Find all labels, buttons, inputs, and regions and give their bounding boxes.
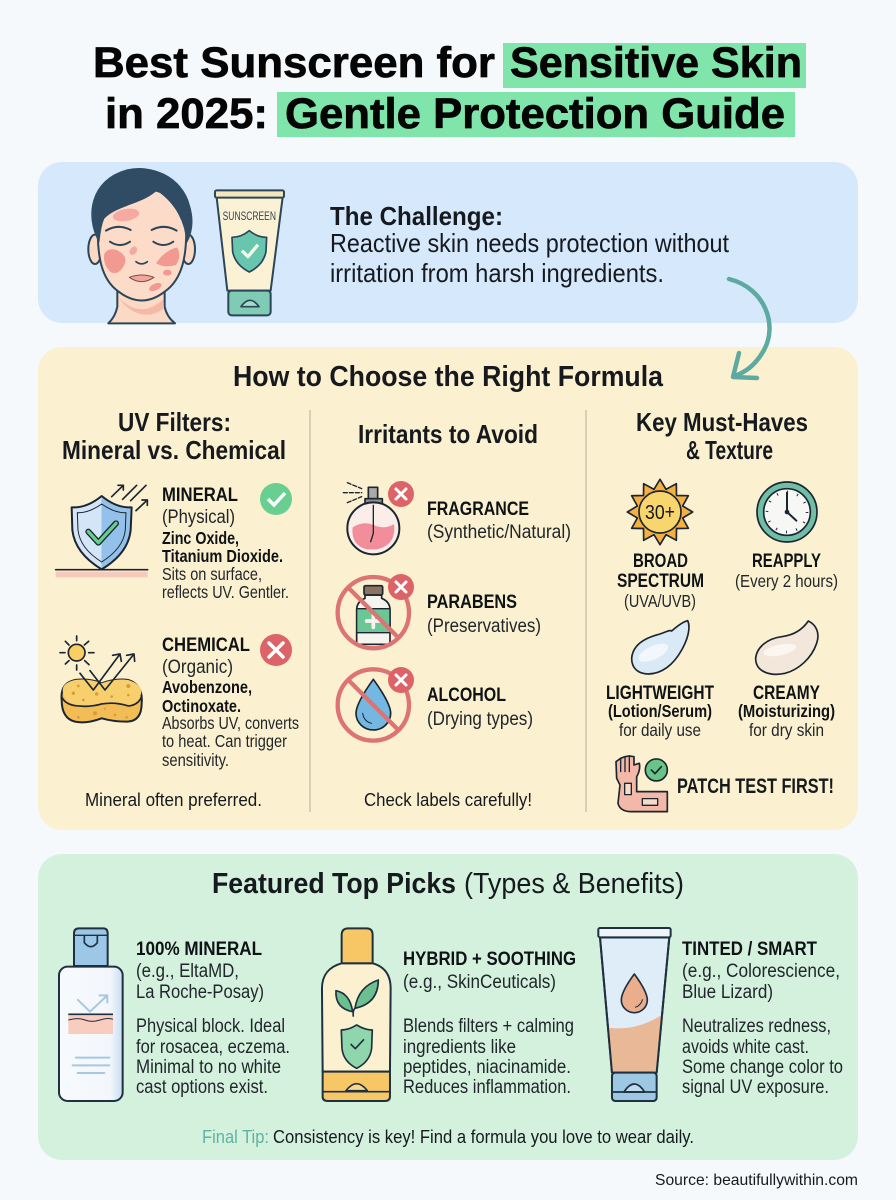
text: mineral: reflects UV. Gentler. xyxy=(162,582,289,602)
text: tinted / smart: avoids white cast. xyxy=(682,1037,809,1058)
text: hybrid + soothing: Reduces inflammation. xyxy=(403,1077,571,1098)
icon: clock xyxy=(757,482,817,542)
text: the challenge: Reactive skin needs protection without xyxy=(330,228,730,258)
icon: red cross badge xyxy=(260,634,292,666)
text: 100% mineral: (e.g., EltaMD, xyxy=(136,961,239,982)
icon: sunscreen tube: SUNSCREEN xyxy=(223,209,276,223)
heading: featured top picks: (Types & Benefits) xyxy=(464,868,684,900)
arrow: challenge to formula xyxy=(729,279,770,378)
text: irritant list: ALCOHOL xyxy=(427,685,506,706)
text: irritant list: FRAGRANCE xyxy=(427,499,529,520)
text: final tip: Consistency is key! Find a formula you love to wear daily. xyxy=(273,1127,694,1147)
text: broad spectrum: BROAD xyxy=(633,551,688,572)
text: hybrid + soothing xyxy=(403,949,576,1098)
icon: patch test arm xyxy=(616,756,667,812)
text: chemical xyxy=(162,635,299,770)
text: 100% mineral: for rosacea, eczema. xyxy=(136,1037,290,1058)
text: creamy xyxy=(738,683,835,740)
text: chemical: Avobenzone, xyxy=(162,677,252,697)
text: mineral xyxy=(162,485,289,602)
text: reapply: REAPPLY xyxy=(752,551,821,572)
text: 100% mineral: La Roche-Posay) xyxy=(136,982,264,1003)
column heading: uv filters: Mineral vs. Chemical xyxy=(62,435,286,465)
text: creamy: (Moisturizing) xyxy=(738,701,835,721)
text: lightweight: for daily use xyxy=(619,720,701,740)
text: creamy: CREAMY xyxy=(753,683,820,704)
icon: mineral bottle xyxy=(59,928,123,1101)
icon: mineral shield xyxy=(56,485,148,577)
text: hybrid + soothing: (e.g., SkinCeuticals) xyxy=(403,972,556,993)
text: mineral: Titanium Dioxide. xyxy=(162,546,283,566)
heading: how to choose: How to Choose the Right Formula xyxy=(233,361,664,393)
title xyxy=(93,39,806,138)
heading: featured top picks xyxy=(212,868,684,900)
icon: spf sun xyxy=(627,479,693,545)
text: chemical: Absorbs UV, converts xyxy=(162,713,299,733)
text: irritant list: (Drying types) xyxy=(427,709,533,730)
text: broad spectrum xyxy=(617,551,704,611)
text: the challenge: The Challenge: xyxy=(330,201,503,231)
icon: creamy swatch xyxy=(756,621,818,674)
text: irritant list xyxy=(427,499,571,730)
icon: perfume bottle xyxy=(343,483,399,554)
heading: featured top picks: Featured Top Picks xyxy=(212,868,456,900)
text: chemical: sensitivity. xyxy=(162,750,229,770)
text: tinted / smart: signal UV exposure. xyxy=(682,1077,829,1098)
text: chemical: to heat. Can trigger xyxy=(162,731,287,751)
source: Source: beautifullywithin.com xyxy=(655,1172,858,1189)
text: hybrid + soothing: ingredients like xyxy=(403,1037,516,1058)
text: mineral: (Physical) xyxy=(162,507,235,528)
panel: the challenge xyxy=(38,162,858,323)
text: 100% mineral xyxy=(136,939,290,1098)
text: 100% mineral: Physical block. Ideal xyxy=(136,1016,285,1037)
text: tinted / smart: Blue Lizard) xyxy=(682,982,773,1003)
column heading: must-haves: & Texture xyxy=(686,435,773,465)
text: lightweight xyxy=(606,683,714,740)
text: tinted / smart: (e.g., Colorescience, xyxy=(682,961,840,982)
text: irritant list: (Synthetic/Natural) xyxy=(427,522,571,543)
icon: tinted tube xyxy=(598,928,671,1101)
text: creamy: for dry skin xyxy=(749,720,824,740)
text: irritant list: PARABENS xyxy=(427,592,517,613)
text: tinted / smart: Some change color to xyxy=(682,1057,843,1078)
title: Best Sunscreen for xyxy=(93,39,495,87)
text: 100% mineral: cast options exist. xyxy=(136,1077,268,1098)
text: mineral: MINERAL xyxy=(162,485,238,506)
column heading: uv filters: UV Filters: xyxy=(118,407,231,437)
callout: patch test first: PATCH TEST FIRST! xyxy=(677,775,834,798)
icon: woman's face with irritated skin xyxy=(88,169,195,323)
text: chemical: (Organic) xyxy=(162,657,233,678)
note: mineral preferred: Mineral often preferred. xyxy=(85,790,262,810)
text: mineral: Zinc Oxide, xyxy=(162,528,239,548)
text: hybrid + soothing: Blends filters + calming xyxy=(403,1016,574,1037)
text: hybrid + soothing: HYBRID + SOOTHING xyxy=(403,949,576,970)
text: mineral: Sits on surface, xyxy=(162,564,262,584)
text: 100% mineral: 100% MINERAL xyxy=(136,939,262,960)
panel: how to choose xyxy=(38,347,858,830)
column heading: uv filters xyxy=(62,407,286,465)
icon: green check badge xyxy=(260,483,292,515)
title: Gentle Protection Guide xyxy=(285,90,785,138)
column heading: must-haves: Key Must-Haves xyxy=(636,407,808,437)
text: chemical: Octinoxate. xyxy=(162,696,241,716)
text: reapply: (Every 2 hours) xyxy=(735,571,838,591)
icons: irritant cross badges xyxy=(388,481,414,693)
text: tinted / smart: Neutralizes redness, xyxy=(682,1016,831,1037)
text: final tip: Final Tip: xyxy=(202,1127,269,1147)
text: tinted / smart: TINTED / SMART xyxy=(682,939,817,960)
text: lightweight: (Lotion/Serum) xyxy=(608,701,712,721)
text: the challenge: irritation from harsh ingredients. xyxy=(330,258,664,288)
icon: chemical sponge xyxy=(60,636,142,722)
text: the challenge xyxy=(330,201,730,288)
icon: spf sun: 30+ xyxy=(645,502,675,524)
text: chemical: CHEMICAL xyxy=(162,635,250,656)
text: hybrid + soothing: peptides, niacinamide. xyxy=(403,1057,571,1078)
text: lightweight: LIGHTWEIGHT xyxy=(606,683,714,704)
icon: sunscreen tube xyxy=(215,190,284,315)
text: irritant list: (Preservatives) xyxy=(427,616,541,637)
icon: lightweight lotion swatch xyxy=(632,621,689,674)
panel: featured top picks xyxy=(38,854,858,1160)
text: 100% mineral: Minimal to no white xyxy=(136,1057,281,1078)
text: tinted / smart xyxy=(682,939,843,1098)
title: in 2025: xyxy=(105,90,268,138)
icon: hybrid soothing bottle xyxy=(322,928,391,1101)
column heading: irritants: Irritants to Avoid xyxy=(358,419,538,449)
text: broad spectrum: SPECTRUM xyxy=(617,571,704,592)
text: broad spectrum: (UVA/UVB) xyxy=(624,591,696,611)
text: reapply xyxy=(735,551,838,591)
icon: no alcohol xyxy=(338,669,409,741)
note: check labels: Check labels carefully! xyxy=(364,790,532,810)
icon: no parabens xyxy=(338,577,409,648)
column heading: must-haves xyxy=(636,407,808,465)
title: Sensitive Skin xyxy=(510,39,802,87)
